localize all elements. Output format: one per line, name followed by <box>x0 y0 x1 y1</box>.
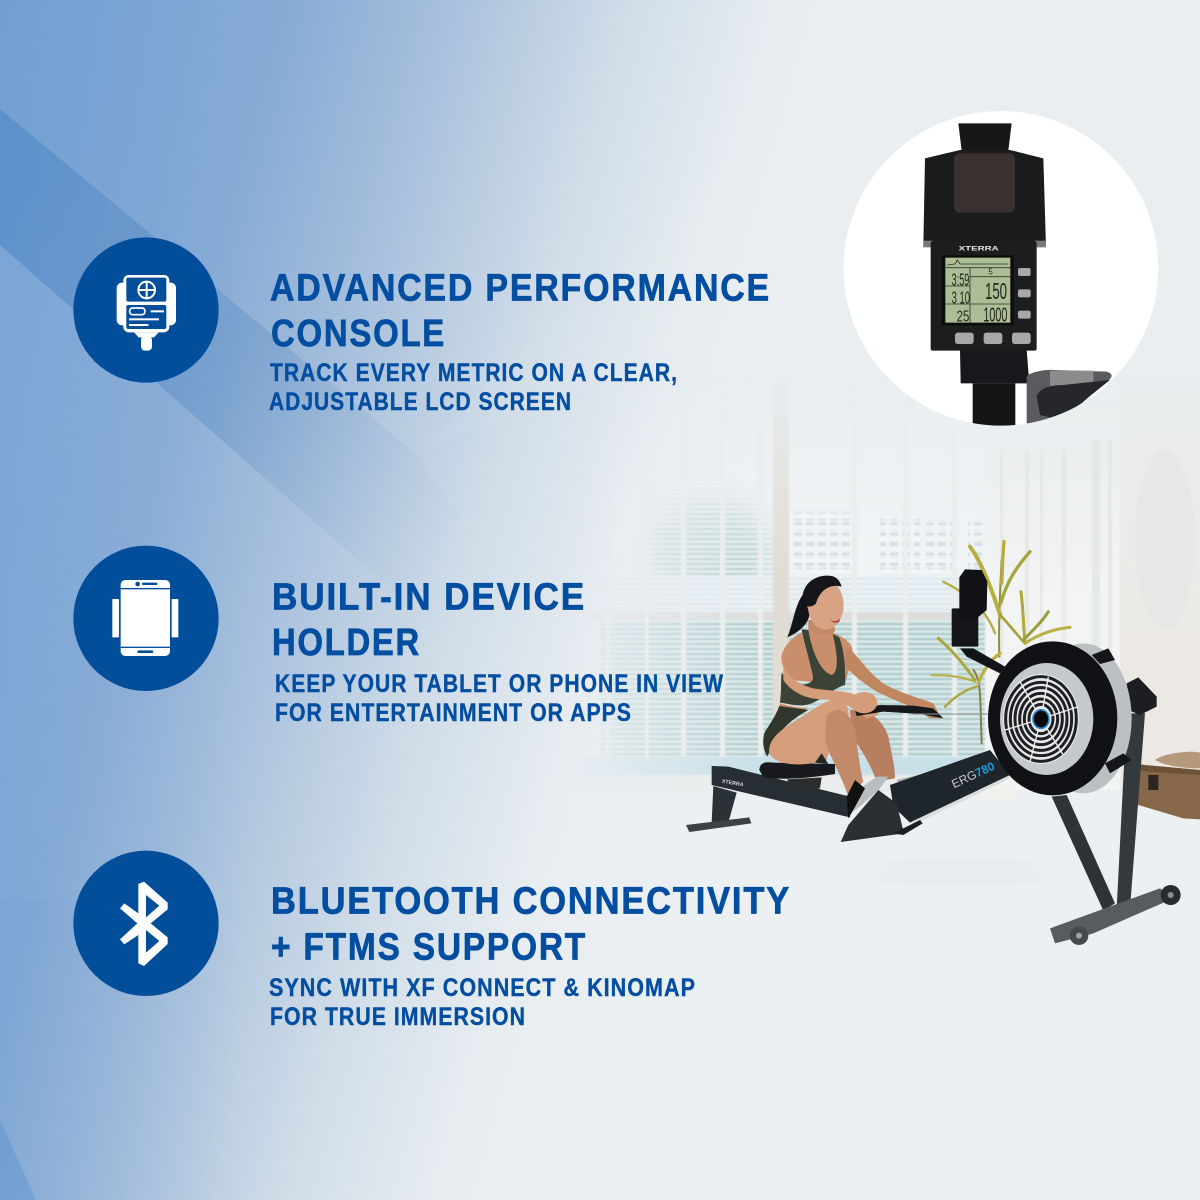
rear rail: XTERRA <box>721 779 744 788</box>
console body <box>931 241 1037 351</box>
inset circle: console <box>844 111 1158 427</box>
feature 2 <box>73 546 724 727</box>
window: trees <box>650 494 774 576</box>
description: KEEP YOUR TABLET OR PHONE IN VIEW <box>275 670 724 698</box>
pot <box>977 778 1017 800</box>
front rail <box>890 750 1010 825</box>
heading: HOLDER <box>272 622 421 664</box>
console body: 1000 <box>983 303 1007 326</box>
hair <box>802 576 842 606</box>
shoes <box>853 777 888 812</box>
near arm <box>783 653 878 718</box>
head <box>808 580 844 630</box>
icon: bluetooth <box>73 851 219 996</box>
description <box>269 974 696 1031</box>
far leg <box>850 709 895 782</box>
description <box>275 670 724 727</box>
console body: 25 <box>957 308 969 325</box>
feature 3 <box>73 851 791 1031</box>
heading <box>271 880 791 968</box>
window: lower view <box>600 620 990 757</box>
room photo background <box>601 422 986 776</box>
rower woman <box>763 576 942 797</box>
heading: ADVANCED PERFORMANCE <box>270 268 771 310</box>
heading <box>272 576 586 664</box>
wall and curtain <box>985 380 1200 790</box>
handlebar <box>1027 370 1112 427</box>
floor <box>520 792 1200 1200</box>
window: cords <box>606 498 958 757</box>
description: TRACK EVERY METRIC ON A CLEAR, <box>270 359 678 387</box>
phone holder arm <box>952 569 1005 673</box>
seat <box>759 762 835 779</box>
description: SYNC WITH XF CONNECT & KINOMAP <box>269 974 696 1002</box>
rowing machine scene <box>686 542 1200 945</box>
heading <box>270 268 771 355</box>
torso skin <box>781 628 852 685</box>
plant <box>932 542 1070 743</box>
far arm <box>845 647 942 718</box>
neck <box>808 620 835 635</box>
sill <box>611 756 970 776</box>
hand <box>851 692 877 713</box>
console body: 5 <box>988 268 993 277</box>
shin <box>825 710 863 797</box>
heading: CONSOLE <box>271 313 446 355</box>
device cradle <box>923 123 1046 247</box>
console body: XTERRA <box>959 246 999 253</box>
thigh <box>769 699 849 764</box>
shorts under <box>815 753 828 764</box>
description: FOR TRUE IMMERSION <box>270 1003 526 1031</box>
console body: 150 <box>985 278 1007 304</box>
feature 1 <box>73 237 771 416</box>
icon: tablet holder <box>73 546 219 691</box>
footplate <box>841 790 904 842</box>
window: buildings <box>790 510 982 570</box>
front rail: ERG780 <box>949 759 997 791</box>
icon: console <box>73 237 219 383</box>
description <box>269 359 678 416</box>
heading: BLUETOOTH CONNECTIVITY <box>271 880 791 922</box>
handle <box>855 705 990 718</box>
flywheel <box>988 641 1132 795</box>
ponytail <box>787 593 809 637</box>
rear rail <box>686 766 850 832</box>
chest <box>1124 752 1200 819</box>
description: FOR ENTERTAINMENT OR APPS <box>275 699 632 727</box>
console buttons <box>955 268 1031 344</box>
heading: + FTMS SUPPORT <box>271 926 587 968</box>
shorts <box>763 706 808 757</box>
description: ADJUSTABLE LCD SCREEN <box>269 388 572 416</box>
crop top <box>780 629 845 705</box>
back legs <box>1050 677 1181 945</box>
heading: BUILT-IN DEVICE <box>272 576 586 618</box>
pole and clamp <box>960 350 1029 427</box>
console body: 3 10 <box>952 287 970 307</box>
console body: 3:59 <box>952 269 969 289</box>
